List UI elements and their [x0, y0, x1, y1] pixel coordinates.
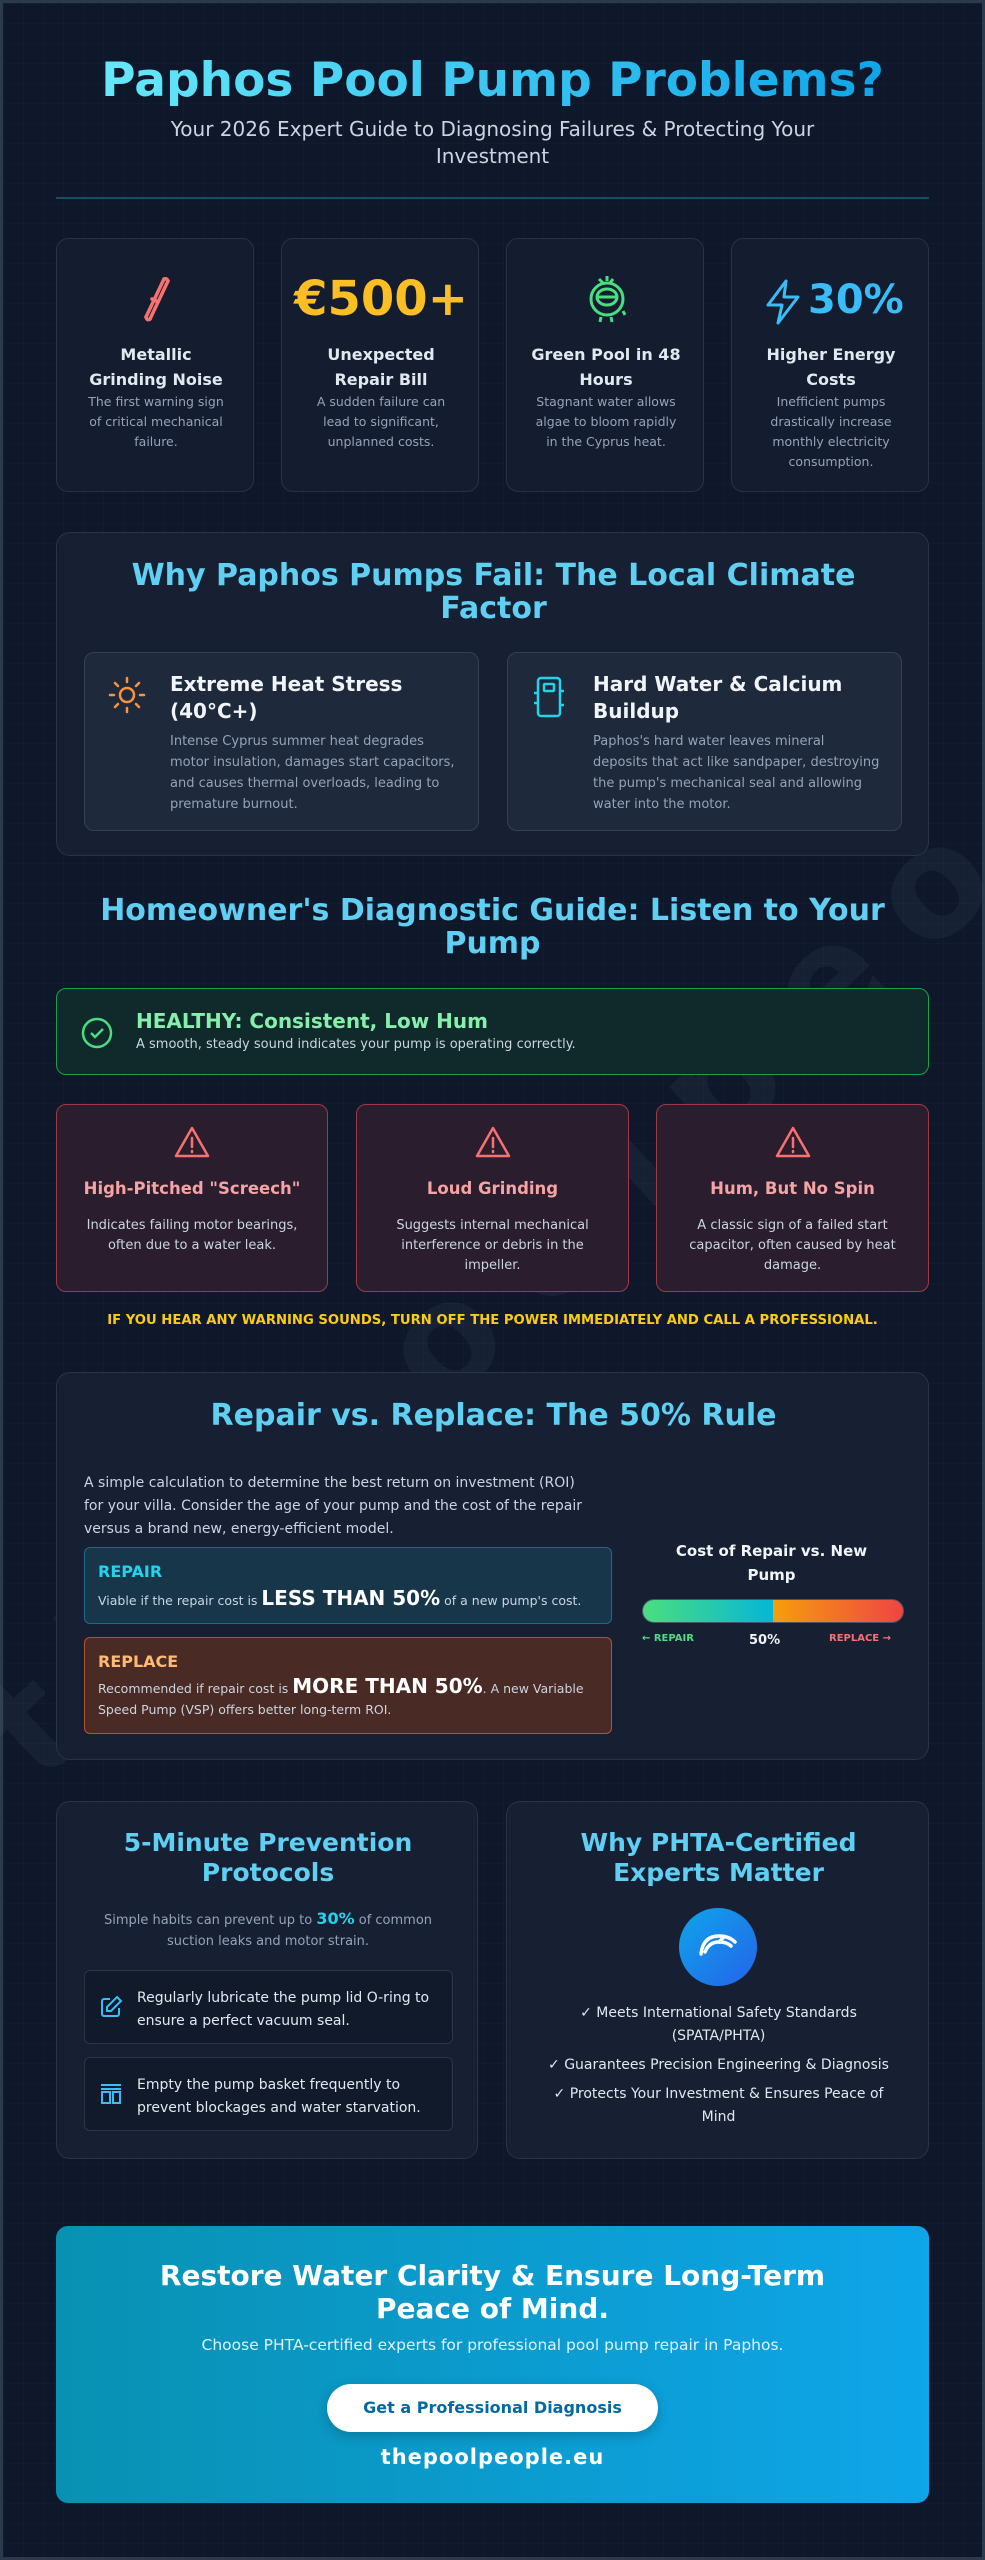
button [327, 2384, 658, 2432]
CTA banner: Choose PHTA-certified experts for professional pool pump repair in Paphos. [202, 2336, 783, 2354]
icon: wrench [144, 277, 170, 322]
heading: diagnostic guide: Pump [444, 926, 541, 961]
warning card: grinding: Loud Grinding [427, 1179, 558, 1198]
stat card: green pool: Hours [579, 370, 633, 389]
warning card: hum: A classic sign of a failed start capacitor, often caused by heat damage. [689, 1218, 896, 1273]
stat card: repair bill [281, 238, 479, 492]
warning card: screech [56, 1104, 328, 1292]
item: lubricate: Regularly lubricate the pump lid O-ring to ensure a perfect vacuum seal. [137, 1990, 429, 2029]
healthy box: A smooth, steady sound indicates your pump is operating correctly. [136, 1037, 576, 1052]
panel: repair vs replace: Repair vs. Replace: The 50% Rule [211, 1398, 776, 1433]
healthy box: HEALTHY: Consistent, Low Hum [136, 1009, 488, 1033]
repair box [84, 1547, 612, 1624]
panel: prevention: Protocols [202, 1858, 334, 1887]
icon: alert [776, 1126, 810, 1158]
icon: filter [534, 676, 564, 718]
warning card: screech: High-Pitched "Screech" [84, 1179, 300, 1198]
title: Paphos Pool Pump Problems? [101, 53, 884, 108]
CTA banner: Restore Water Clarity & Ensure Long-Term [160, 2259, 825, 2292]
chart: cost bar: ← REPAIR [642, 1633, 694, 1644]
warning card: hum: Hum, But No Spin [710, 1179, 875, 1198]
warning card: grinding [356, 1104, 629, 1292]
heading: Why Paphos Pumps Fail: The Local Climate [132, 558, 855, 593]
stat card: energy [731, 238, 929, 492]
stat: 30% with bolt: 30% [808, 277, 904, 323]
replace box: Recommended if repair cost is MORE THAN 50%. A new Variable Speed Pump (VSP) offers better long-term ROI. [98, 1674, 584, 1717]
checklist: ✓ Guarantees Precision Engineering & Diagnosis [548, 2057, 889, 2073]
icon: sun [108, 676, 146, 714]
item: lubricate [84, 1970, 453, 2044]
checklist: ✓ Meets International Safety Standards (SPATA/PHTA) [580, 2005, 857, 2044]
icon: logo circle [679, 1908, 757, 1986]
chart: cost bar [642, 1542, 904, 1648]
stat card: green pool: Stagnant water allows algae to bloom rapidly in the Cyprus heat. [536, 394, 676, 449]
description [84, 1475, 582, 1537]
panel: PHTA [506, 1801, 929, 2159]
panel: repair vs replace [56, 1372, 929, 1760]
checklist [548, 2005, 889, 2125]
stat card: green pool: Green Pool in 48 [531, 345, 681, 364]
warning card: hum [656, 1104, 929, 1292]
subtitle: Your 2026 Expert Guide to Diagnosing Failures & Protecting Your Investment [171, 117, 814, 168]
card: hard water: Paphos's hard water leaves mineral [593, 734, 824, 749]
panel: PHTA: Why PHTA-Certified [580, 1828, 856, 1857]
item: basket [84, 2057, 453, 2131]
stat card: energy: Costs [806, 370, 856, 389]
repair box: Viable if the repair cost is LESS THAN 50% of a new pump's cost. [98, 1586, 581, 1610]
CTA banner: Peace of Mind. [376, 2292, 609, 2325]
card: hard water: deposits that act like sandpaper, destroying the pump's mechanical seal and allowing water into the motor. [593, 755, 879, 812]
stat card: repair bill: Repair Bill [334, 370, 428, 389]
replace box [84, 1637, 612, 1734]
warning card: grinding: Suggests internal mechanical interference or debris in the impeller. [396, 1218, 589, 1273]
icon: check [82, 1018, 112, 1048]
chart: cost bar: REPLACE → [829, 1633, 891, 1644]
stat card: repair bill: Unexpected [327, 345, 435, 364]
CTA banner: thepoolpeople.eu [381, 2445, 604, 2469]
stat card: repair bill: A sudden failure can lead to significant, unplanned costs. [317, 394, 445, 449]
stat: 30% with bolt [766, 277, 904, 324]
stat card: green pool [506, 238, 704, 492]
chart: cost bar: Cost of Repair vs. New Pump [676, 1542, 867, 1584]
stat card: grinding noise: Grinding Noise [89, 370, 223, 389]
panel: climate factor [56, 532, 929, 856]
description: A simple calculation to determine the best return on investment (ROI) [84, 1475, 575, 1491]
CTA banner [56, 2226, 929, 2503]
heading: diagnostic guide: Homeowner's Diagnostic Guide: Listen to Your [100, 893, 885, 928]
description: for your villa. Consider the age of your pump and the cost of the repair versus a brand new, energy-efficient model. [84, 1498, 582, 1537]
button: Get a Professional Diagnosis [363, 2398, 622, 2417]
icon: alert [174, 1126, 210, 1158]
warning note: IF YOU HEAR ANY WARNING SOUNDS, TURN OFF THE POWER IMMEDIATELY AND CALL A PROFESSIONAL. [107, 1313, 878, 1328]
card: hard water [507, 652, 902, 831]
card: heat [84, 652, 479, 831]
panel: prevention: 5-Minute Prevention [124, 1828, 412, 1857]
heading [132, 558, 855, 626]
replace box: REPLACE [98, 1652, 178, 1671]
heading: Factor [440, 591, 547, 626]
checklist: ✓ Protects Your Investment & Ensures Peace of Mind [554, 2086, 883, 2125]
item: basket: Empty the pump basket frequently to prevent blockages and water starvation. [137, 2077, 421, 2116]
stat card: grinding noise: Metallic [120, 345, 192, 364]
card: heat: Extreme Heat Stress (40°C+) [170, 672, 402, 723]
stat card: grinding noise [56, 238, 254, 492]
healthy box [56, 988, 929, 1075]
stat: €500+: €500+ [294, 271, 468, 327]
warning card: screech: Indicates failing motor bearings, often due to a water leak. [87, 1218, 297, 1253]
icon: basket [101, 2084, 121, 2104]
icon: edit [101, 1996, 122, 2017]
icon: algae [590, 276, 626, 322]
chart: cost bar: 50% [749, 1633, 780, 1648]
card: heat: Intense Cyprus summer heat degrades motor insulation, damages start capacitors, and causes thermal overloads, leading to premature burnout. [170, 734, 455, 812]
card: hard water: Hard Water & Calcium Buildup [593, 672, 842, 723]
stat card: energy: Inefficient pumps drastically increase monthly electricity consumption. [770, 394, 892, 469]
repair box: REPAIR [98, 1562, 162, 1581]
panel: prevention [56, 1801, 478, 2159]
panel: prevention: Simple habits can prevent up to 30% of common suction leaks and motor strain. [104, 1909, 432, 1949]
icon: alert [476, 1126, 510, 1158]
heading: diagnostic guide [100, 893, 885, 961]
stat card: energy: Higher Energy [766, 345, 895, 364]
panel: PHTA: Experts Matter [613, 1858, 824, 1887]
stat card: grinding noise: The first warning sign of critical mechanical failure. [88, 394, 224, 449]
